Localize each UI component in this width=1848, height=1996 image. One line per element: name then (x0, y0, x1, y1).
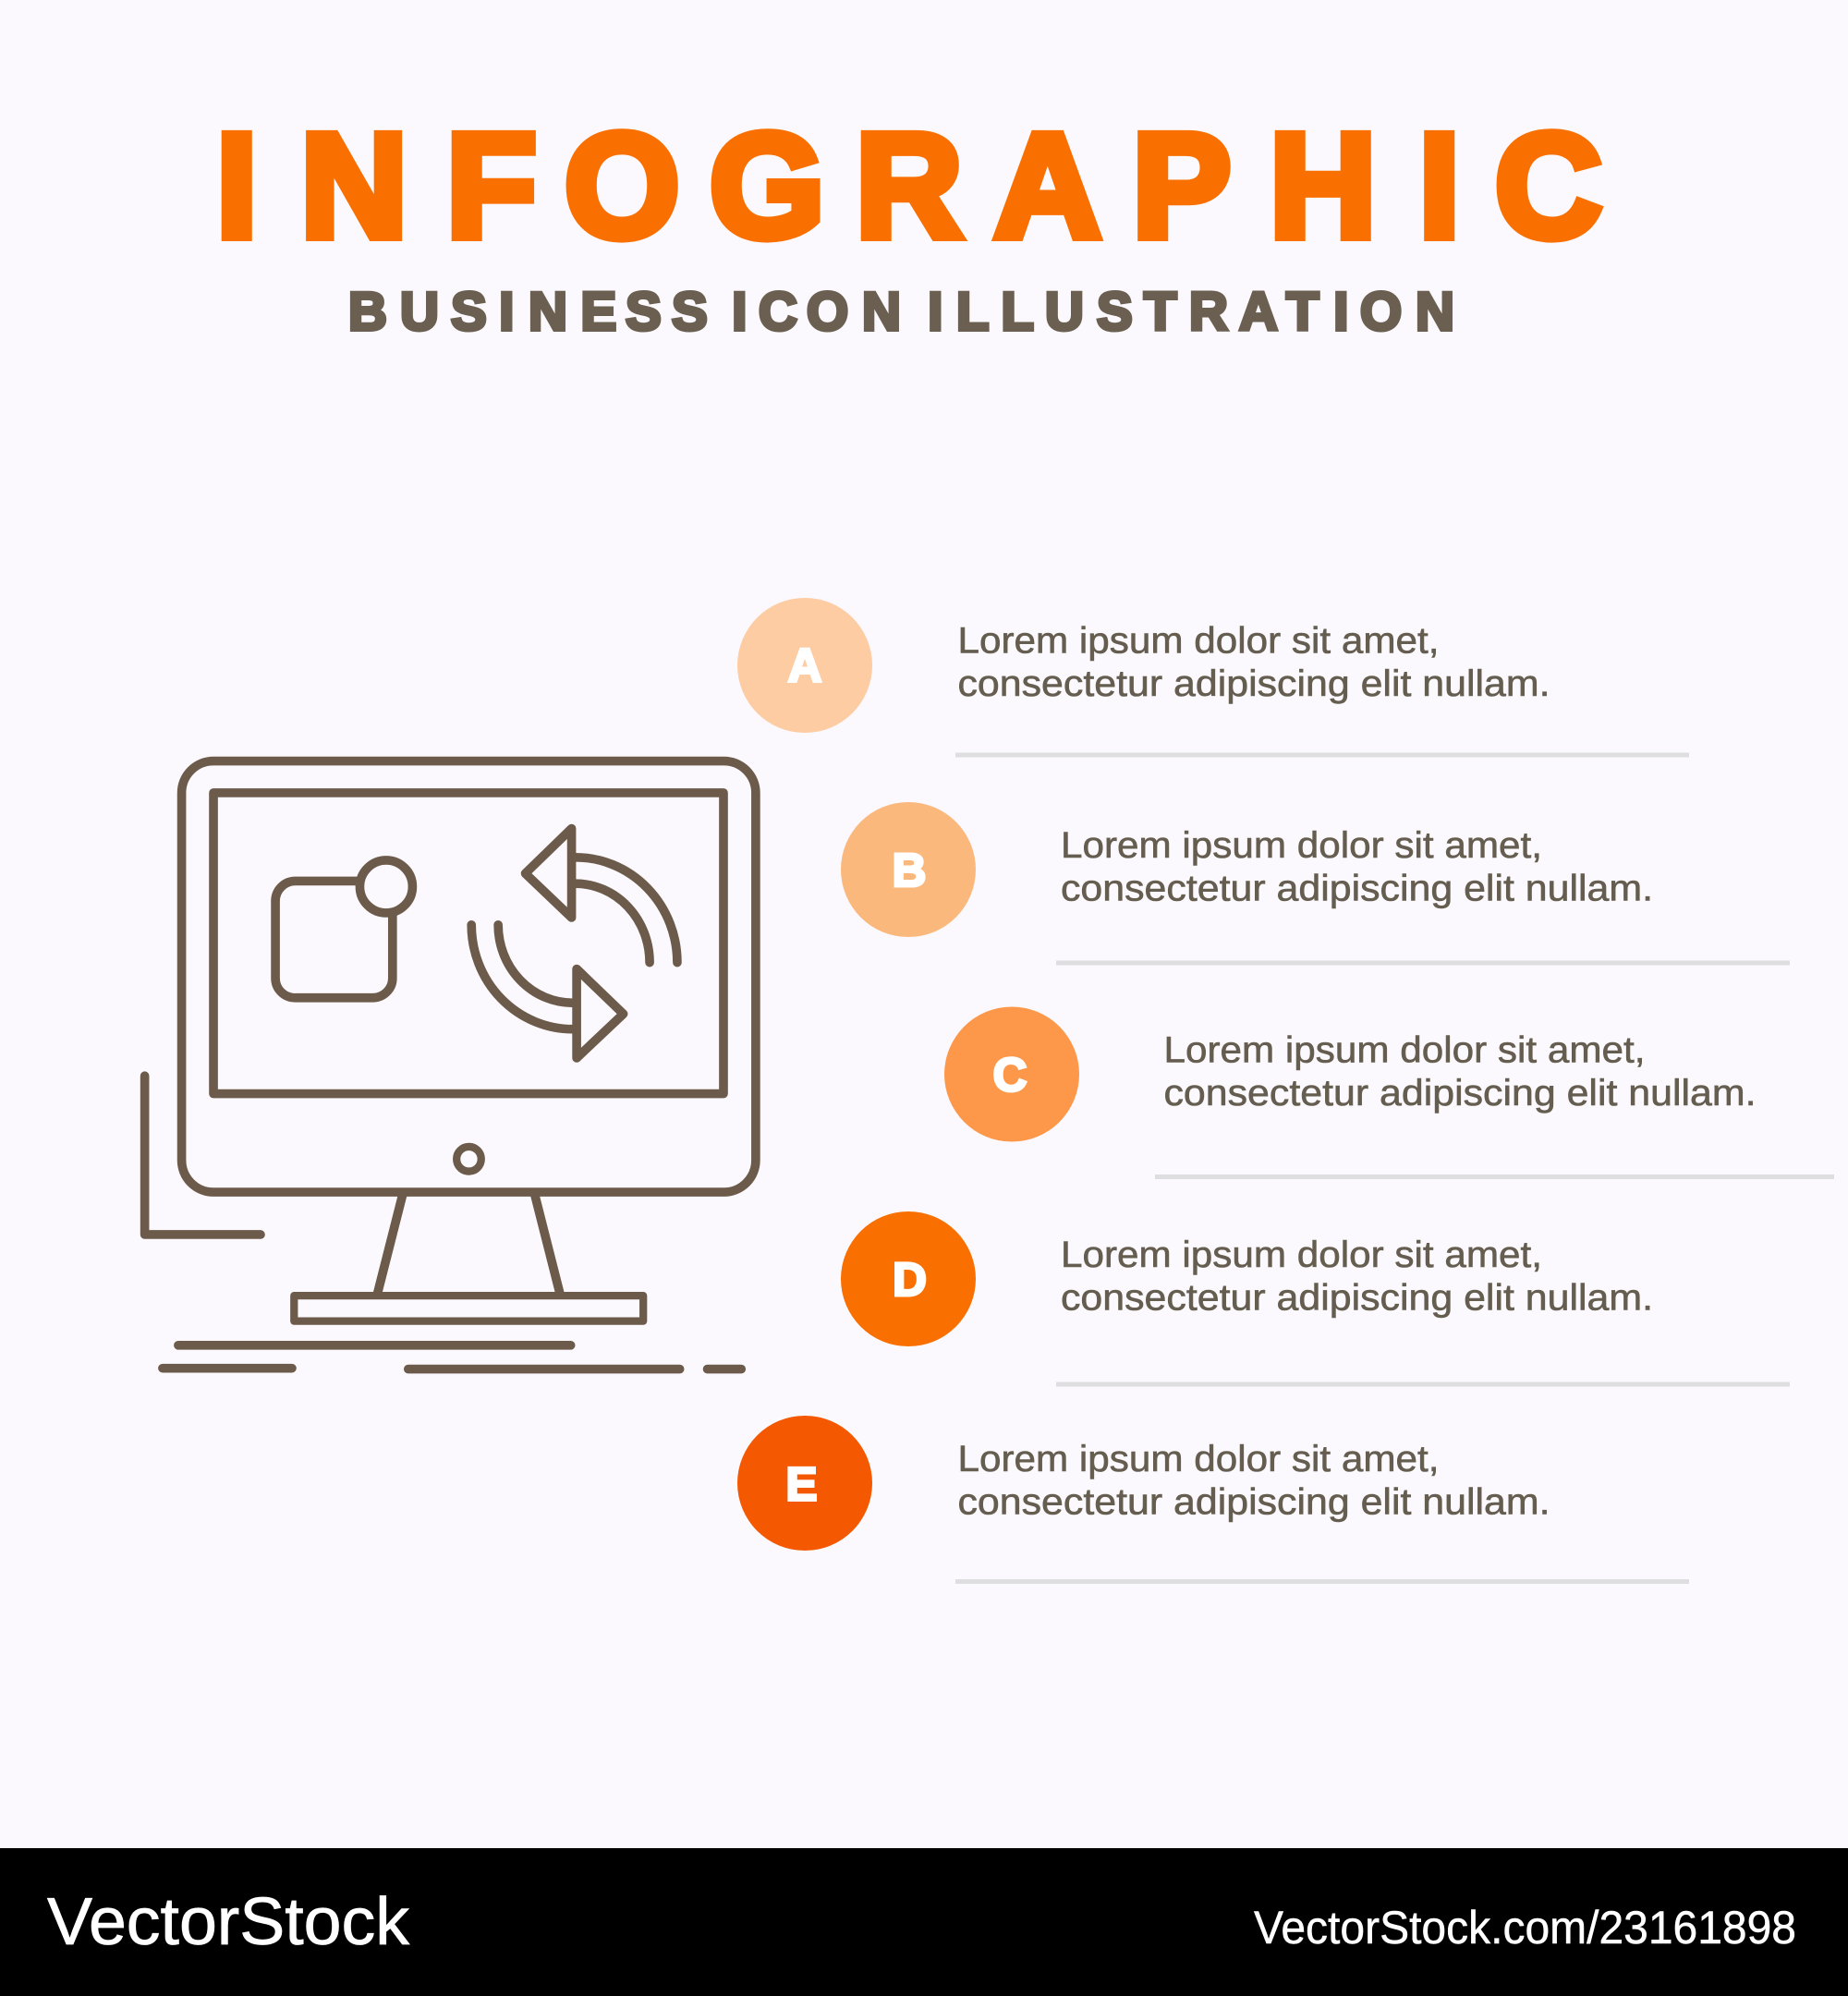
text A (957, 621, 1550, 704)
monitor stand (377, 1196, 560, 1295)
arrow: update right (471, 925, 624, 1058)
badge A (737, 598, 872, 733)
badge D: D (893, 1253, 927, 1306)
title: INFOGRAPHIC (216, 103, 1602, 268)
badge E: E (785, 1458, 818, 1510)
text B: Lorem ipsum dolor sit amet, (1061, 825, 1542, 866)
text C (1164, 1029, 1756, 1114)
text B (1061, 825, 1653, 909)
item D (841, 1211, 1790, 1386)
item C (944, 1007, 1834, 1179)
badge E (737, 1416, 872, 1551)
text B: consectetur adipiscing elit nullam. (1061, 869, 1653, 909)
item A (737, 598, 1689, 758)
monitor screen (213, 793, 723, 1094)
text A: consectetur adipiscing elit nullam. (957, 663, 1550, 704)
subtitle: BUSINESS ICON ILLUSTRATION (348, 282, 1454, 342)
text E (957, 1439, 1550, 1523)
power button (456, 1147, 481, 1172)
badge C (944, 1007, 1079, 1142)
text C: Lorem ipsum dolor sit amet, (1164, 1029, 1645, 1070)
badge C: C (993, 1048, 1027, 1101)
badge A: A (788, 639, 821, 691)
item B (841, 802, 1790, 965)
badge B: B (893, 844, 926, 896)
text E: Lorem ipsum dolor sit amet, (957, 1439, 1440, 1479)
text D (1061, 1235, 1653, 1318)
badge D (841, 1211, 976, 1346)
arrow: update left (526, 829, 677, 963)
monitor body (182, 761, 756, 1192)
icon: computer monitor with sync arrows (145, 761, 756, 1369)
monitor base (294, 1296, 643, 1321)
ground lines (163, 1345, 741, 1369)
badge B (841, 802, 976, 937)
text E: consectetur adipiscing elit nullam. (957, 1482, 1550, 1523)
text D: Lorem ipsum dolor sit amet, (1061, 1235, 1542, 1275)
text C: consectetur adipiscing elit nullam. (1164, 1073, 1756, 1114)
footer brand: VectorStock (47, 1885, 410, 1959)
text A: Lorem ipsum dolor sit amet, (957, 621, 1440, 662)
corner bracket (145, 1076, 261, 1235)
footer bar (0, 1848, 1848, 1996)
app square with notification badge (275, 860, 412, 998)
text D: consectetur adipiscing elit nullam. (1061, 1277, 1653, 1318)
footer url: VectorStock.com/23161898 (1254, 1902, 1796, 1953)
item E (737, 1416, 1689, 1584)
